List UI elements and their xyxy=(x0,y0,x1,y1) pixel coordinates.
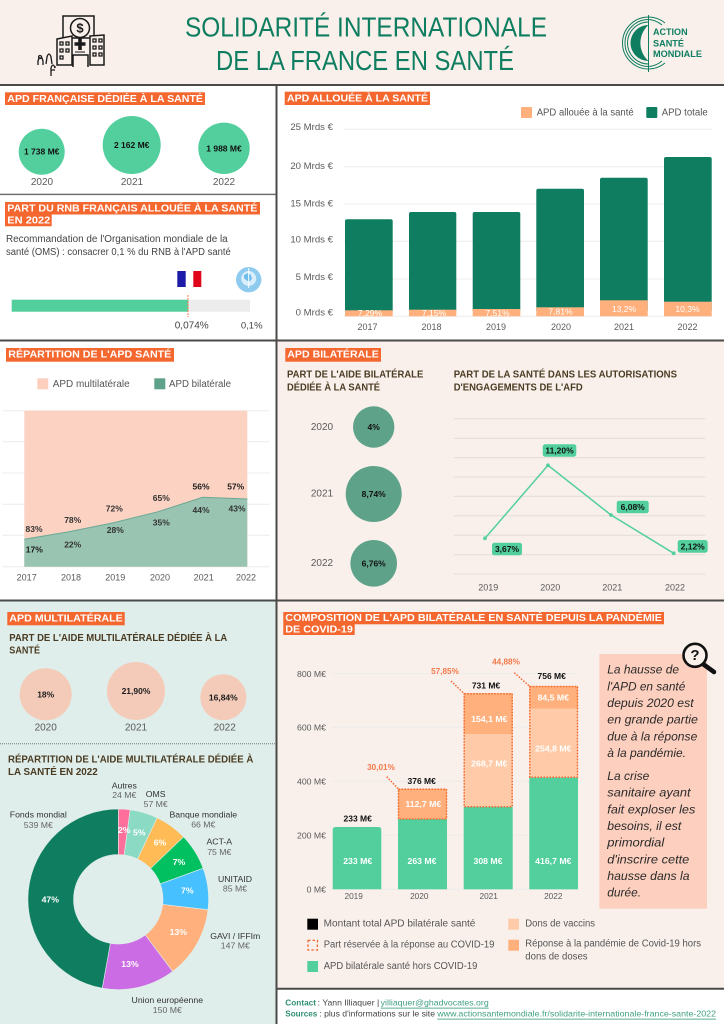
donut chart: 24 M€ xyxy=(112,790,137,800)
heading: répartition de l'aide multilatérale: RÉPARTITION DE L'AIDE MULTILATÉRALE DÉDIÉE À xyxy=(8,752,254,765)
title: SOLIDARITÉ INTERNATIONALE xyxy=(185,12,547,42)
panel: APD bilatérale xyxy=(277,341,724,600)
panel: APD française dédiée à la santé: 2022 xyxy=(213,177,236,188)
panel: APD française dédiée à la santé: 2020 xyxy=(31,177,54,188)
stacked bar chart: 44,88% xyxy=(492,658,521,666)
icon: WHO emblem xyxy=(236,267,261,292)
bar chart: 7,81% xyxy=(548,306,573,316)
footer: contact and sources xyxy=(285,998,716,1019)
line chart: AFD: 3,67% xyxy=(495,544,519,554)
area chart: 44% xyxy=(192,505,210,515)
heading: part de l'aide bilatérale: PART DE L'AIDE BILATÉRALE xyxy=(287,367,423,380)
donut chart: 7% xyxy=(181,886,194,896)
bar chart xyxy=(290,122,712,332)
bar chart: 15 Mrds € xyxy=(290,198,334,210)
area chart: 2017 xyxy=(17,572,37,582)
stacked bar chart: 416,7 M€ xyxy=(535,856,572,866)
panel: part du RNB français: Recommandation de l'Organisation mondiale de la xyxy=(6,234,228,245)
stacked bar chart: 112,7 M€ xyxy=(405,799,441,809)
icon: magnifying glass with question mark: ? xyxy=(690,647,700,664)
donut chart: Autres xyxy=(112,781,138,791)
bar chart: 10,3% xyxy=(675,304,700,314)
icon: Action Santé Mondiale logo: MONDIALE xyxy=(653,49,702,60)
donut chart: OMS xyxy=(146,789,166,799)
legend: Réponse à la pandémie de Covid-19 hors xyxy=(525,938,701,950)
heading: répartition de l'aide multilatérale: LA SANTÉ EN 2022 xyxy=(8,765,98,778)
donut chart: 75 M€ xyxy=(207,847,232,857)
legend: APD totale xyxy=(662,108,708,118)
area chart: 2021 xyxy=(194,572,214,582)
stacked bar chart: 0 M€ xyxy=(307,884,326,894)
area chart: 43% xyxy=(228,504,246,514)
title xyxy=(185,12,547,76)
bar chart: 0 Mrds € xyxy=(296,308,334,318)
donut chart: 85 M€ xyxy=(223,883,247,893)
bubble chart: aide multilatérale: 18% xyxy=(37,689,55,699)
panel: composition de l'APD bilatérale: DE COVID-19 xyxy=(285,624,353,636)
panel: part du RNB français: PART DU RNB FRANÇAIS ALLOUÉE À LA SANTÉ xyxy=(7,201,257,214)
bubble chart: aide multilatérale: 21,90% xyxy=(122,686,151,696)
legend: APD allouée à la santé xyxy=(537,108,634,118)
donut chart: 66 M€ xyxy=(191,819,216,829)
area chart: 2018 xyxy=(61,572,81,582)
area chart: 57% xyxy=(227,482,245,492)
line chart: AFD: 11,20% xyxy=(545,446,574,456)
callout: fait exploser les xyxy=(607,804,696,816)
stacked bar chart: 2019 xyxy=(344,891,363,901)
area chart: 65% xyxy=(153,493,170,503)
bubble chart: aide multilatérale xyxy=(20,662,246,734)
bubble chart: aide multilatérale: 2022 xyxy=(214,722,236,734)
callout: sanitaire ayant xyxy=(607,788,691,800)
line chart: AFD xyxy=(454,419,708,593)
panel: part du RNB français: 0,1% xyxy=(241,320,263,332)
panel: APD française dédiée à la santé xyxy=(5,92,250,188)
callout: durée. xyxy=(607,888,641,900)
bar chart: 5 Mrds € xyxy=(296,272,334,283)
panel: APD française dédiée à la santé: 1 738 M€ xyxy=(24,147,60,157)
panel: répartition de l'APD santé: RÉPARTITION DE L'APD SANTÉ xyxy=(8,348,171,360)
donut chart: Banque mondiale xyxy=(169,810,237,820)
callout: La hausse de xyxy=(607,665,679,677)
area chart: 2022 xyxy=(236,572,256,582)
panel: part du RNB français: santé (OMS) : consacrer 0,1 % du RNB à l'APD santé xyxy=(6,247,231,258)
area chart: 56% xyxy=(192,482,210,492)
bubble chart: aide bilatérale: 2021 xyxy=(311,488,334,500)
donut chart: Fonds mondial xyxy=(10,809,67,819)
panel: APD française dédiée à la santé: 1 988 M€ xyxy=(206,143,242,153)
panel: header xyxy=(0,0,724,85)
heading: part de la santé AFD: PART DE LA SANTÉ DANS LES AUTORISATIONS xyxy=(454,367,677,380)
heading: part de la santé AFD: D'ENGAGEMENTS DE L'AFD xyxy=(454,382,583,394)
bubble chart: aide bilatérale: 2020 xyxy=(311,422,334,433)
stacked bar chart: 233 M€ xyxy=(344,813,372,823)
area chart: 83% xyxy=(25,524,43,534)
stacked bar chart: 731 M€ xyxy=(472,680,500,690)
icon: hospital: $ xyxy=(76,20,84,36)
bar chart: 10 Mrds € xyxy=(290,234,334,246)
callout: besoins, il est xyxy=(607,821,682,833)
stacked bar chart: 254,8 M€ xyxy=(535,744,572,754)
panel: APD allouée à la santé: APD ALLOUÉE À LA SANTÉ xyxy=(287,92,428,104)
heading: part de l'aide multilatérale: SANTÉ xyxy=(9,644,40,657)
icon: French flag xyxy=(177,271,201,287)
donut chart: 147 M€ xyxy=(221,940,250,950)
area chart: 78% xyxy=(64,515,82,525)
donut chart: UNITAID xyxy=(218,874,252,884)
panel: composition de l'APD bilatérale: COMPOSITION DE L'APD BILATÉRALE EN SANTÉ DEPUIS LA PANDÉMIE xyxy=(285,611,662,624)
callout: l'APD en santé xyxy=(607,681,685,693)
footer: contact and sources: Contact xyxy=(285,998,316,1008)
callout: hausse dans la xyxy=(607,871,690,883)
stacked bar chart: 57,85% xyxy=(431,667,460,676)
donut chart xyxy=(10,781,260,1015)
stacked bar chart: 268,7 M€ xyxy=(471,759,508,769)
stacked bar chart xyxy=(297,658,578,901)
panel: part du RNB français: EN 2022 xyxy=(7,214,50,226)
legend: Part réservée à la réponse au COVID-19 xyxy=(324,940,495,950)
bubble chart: aide bilatérale: 2022 xyxy=(311,558,334,569)
callout: depuis 2020 est xyxy=(607,698,694,710)
stacked bar chart: 84,5 M€ xyxy=(538,692,569,702)
stacked bar chart: 200 M€ xyxy=(297,830,326,840)
stacked bar chart: 2020 xyxy=(410,891,429,901)
footer: contact and sources: yilliaquer@ghadvocates.org xyxy=(381,998,489,1008)
bubble chart: aide bilatérale xyxy=(311,406,402,587)
bubble chart: aide bilatérale: 4% xyxy=(368,422,380,432)
heading: part de l'aide multilatérale xyxy=(9,631,228,657)
heading: part de la santé AFD xyxy=(454,367,677,394)
donut chart: ACT-A xyxy=(207,836,232,846)
callout: en grande partie xyxy=(607,715,698,727)
line chart: AFD: 2,12% xyxy=(681,541,705,551)
panel: répartition de l'APD santé xyxy=(3,348,269,582)
icon: hospital xyxy=(38,16,104,76)
panel: APD française dédiée à la santé: 2021 xyxy=(121,177,144,188)
donut chart: 47% xyxy=(42,894,59,904)
donut chart: 539 M€ xyxy=(24,820,53,830)
stacked bar chart: 233 M€ xyxy=(343,856,372,866)
area chart: 28% xyxy=(107,525,124,535)
bar chart: 13,2% xyxy=(612,304,637,314)
icon: Action Santé Mondiale logo xyxy=(622,15,702,72)
icon: Action Santé Mondiale logo: SANTÉ xyxy=(653,38,684,50)
footer: contact and sources: : Yann Illiaquer | xyxy=(318,998,379,1008)
donut chart: 5% xyxy=(133,828,146,838)
callout: d'inscrire cette xyxy=(607,854,689,866)
area chart: 22% xyxy=(64,539,82,549)
line chart: AFD: 2022 xyxy=(665,583,685,593)
bar chart: 7,15% xyxy=(422,308,447,318)
bar chart: 2019 xyxy=(486,322,506,332)
line chart: AFD: 6,08% xyxy=(621,502,645,512)
bar chart: 2020 xyxy=(551,322,571,332)
bubble chart: aide bilatérale: 6,76% xyxy=(362,558,386,568)
panel: APD multilatérale: APD MULTILATÉRALE xyxy=(9,612,123,625)
icon: Action Santé Mondiale logo: ACTION xyxy=(653,27,688,38)
callout xyxy=(599,654,707,909)
donut chart: 57 M€ xyxy=(144,799,168,809)
donut chart: 13% xyxy=(170,927,187,937)
line chart: AFD: 2021 xyxy=(602,583,622,593)
stacked bar chart: 400 M€ xyxy=(297,776,326,786)
bubble chart: aide multilatérale: 2020 xyxy=(35,722,57,734)
stacked bar chart: 2022 xyxy=(544,891,563,901)
donut chart: 2% xyxy=(118,825,131,835)
footer: contact and sources: : plus d'informations sur le site xyxy=(319,1009,435,1019)
heading: part de l'aide bilatérale: DÉDIÉE À LA SANTÉ xyxy=(287,381,380,394)
bubble chart: aide bilatérale: 8,74% xyxy=(362,489,386,499)
panel: APD bilatérale: APD BILATÉRALE xyxy=(287,348,379,360)
heading: répartition de l'aide multilatérale xyxy=(8,752,254,778)
donut chart: 6% xyxy=(154,837,167,847)
panel: part du RNB français: 0,074% xyxy=(175,320,209,332)
legend: APD multilatérale xyxy=(53,379,130,390)
donut chart: 150 M€ xyxy=(153,1005,182,1015)
title: DE LA FRANCE EN SANTÉ xyxy=(216,45,514,76)
stacked bar chart: 263 M€ xyxy=(408,856,437,866)
stacked bar chart: 154,1 M€ xyxy=(471,714,508,724)
icon: magnifying glass with question mark xyxy=(684,644,714,672)
area chart: 2020 xyxy=(150,572,170,582)
stacked bar chart: 2021 xyxy=(479,891,498,901)
donut chart: Union européenne xyxy=(132,995,203,1005)
heading: part de l'aide multilatérale: PART DE L'AIDE MULTILATÉRALE DÉDIÉE À LA xyxy=(9,631,228,644)
area chart: 17% xyxy=(26,544,43,554)
panel: composition de l'APD bilatérale xyxy=(277,601,724,989)
footer: contact and sources: www.actionsantemondiale.fr/solidarite-internationale-france-sante-2022 xyxy=(436,1009,716,1019)
bar chart: 25 Mrds € xyxy=(290,122,334,133)
callout: à la pandémie. xyxy=(607,748,686,760)
legend: APD bilatérale xyxy=(169,379,231,390)
stacked bar chart: 376 M€ xyxy=(408,776,436,786)
bubble chart: aide multilatérale: 16,84% xyxy=(209,692,238,702)
bar chart: 2022 xyxy=(677,322,698,332)
bar chart: 2017 xyxy=(357,322,378,332)
heading: part de l'aide bilatérale xyxy=(287,367,423,394)
callout: primordial xyxy=(606,838,665,850)
panel: APD française dédiée à la santé: APD FRANÇAISE DÉDIÉE À LA SANTÉ xyxy=(7,92,203,105)
panel: APD allouée à la santé xyxy=(277,86,724,340)
line chart: AFD: 2019 xyxy=(478,583,498,593)
area chart: 2019 xyxy=(105,572,125,582)
legend: Montant total APD bilatérale santé xyxy=(324,918,476,930)
area chart xyxy=(3,411,269,582)
panel: part du RNB français xyxy=(5,201,263,332)
stacked bar chart: 600 M€ xyxy=(297,722,326,732)
legend: Dons de vaccins xyxy=(525,918,595,930)
bar chart: 20 Mrds € xyxy=(290,161,334,172)
bubble chart: aide multilatérale: 2021 xyxy=(125,722,148,734)
legend xyxy=(37,378,231,390)
stacked bar chart: 800 M€ xyxy=(297,669,326,679)
legend: APD bilatérale santé hors COVID-19 xyxy=(324,961,478,972)
stacked bar chart: 308 M€ xyxy=(474,856,503,866)
bar chart: 2018 xyxy=(421,322,442,332)
legend xyxy=(521,107,708,118)
callout: due à la réponse xyxy=(607,731,697,743)
donut chart: 13% xyxy=(121,959,139,969)
panel: APD française dédiée à la santé: 2 162 M€ xyxy=(114,140,150,150)
bar chart: 7,51% xyxy=(485,308,510,318)
panel: APD multilatérale xyxy=(0,601,276,1024)
stacked bar chart: 756 M€ xyxy=(538,671,566,681)
stacked bar chart: 30,01% xyxy=(367,763,396,772)
callout: La crise xyxy=(607,771,649,783)
area chart: 35% xyxy=(153,518,170,528)
donut chart: 7% xyxy=(173,857,186,867)
footer: contact and sources: Sources xyxy=(285,1009,318,1019)
legend xyxy=(307,918,701,972)
bar chart: 2021 xyxy=(614,322,634,332)
bar chart: 7,29% xyxy=(358,308,383,318)
donut chart: GAVI / IFFIm xyxy=(210,931,260,941)
area chart: 72% xyxy=(106,504,123,514)
line chart: AFD: 2020 xyxy=(540,583,560,593)
legend: dons de doses xyxy=(525,952,588,962)
